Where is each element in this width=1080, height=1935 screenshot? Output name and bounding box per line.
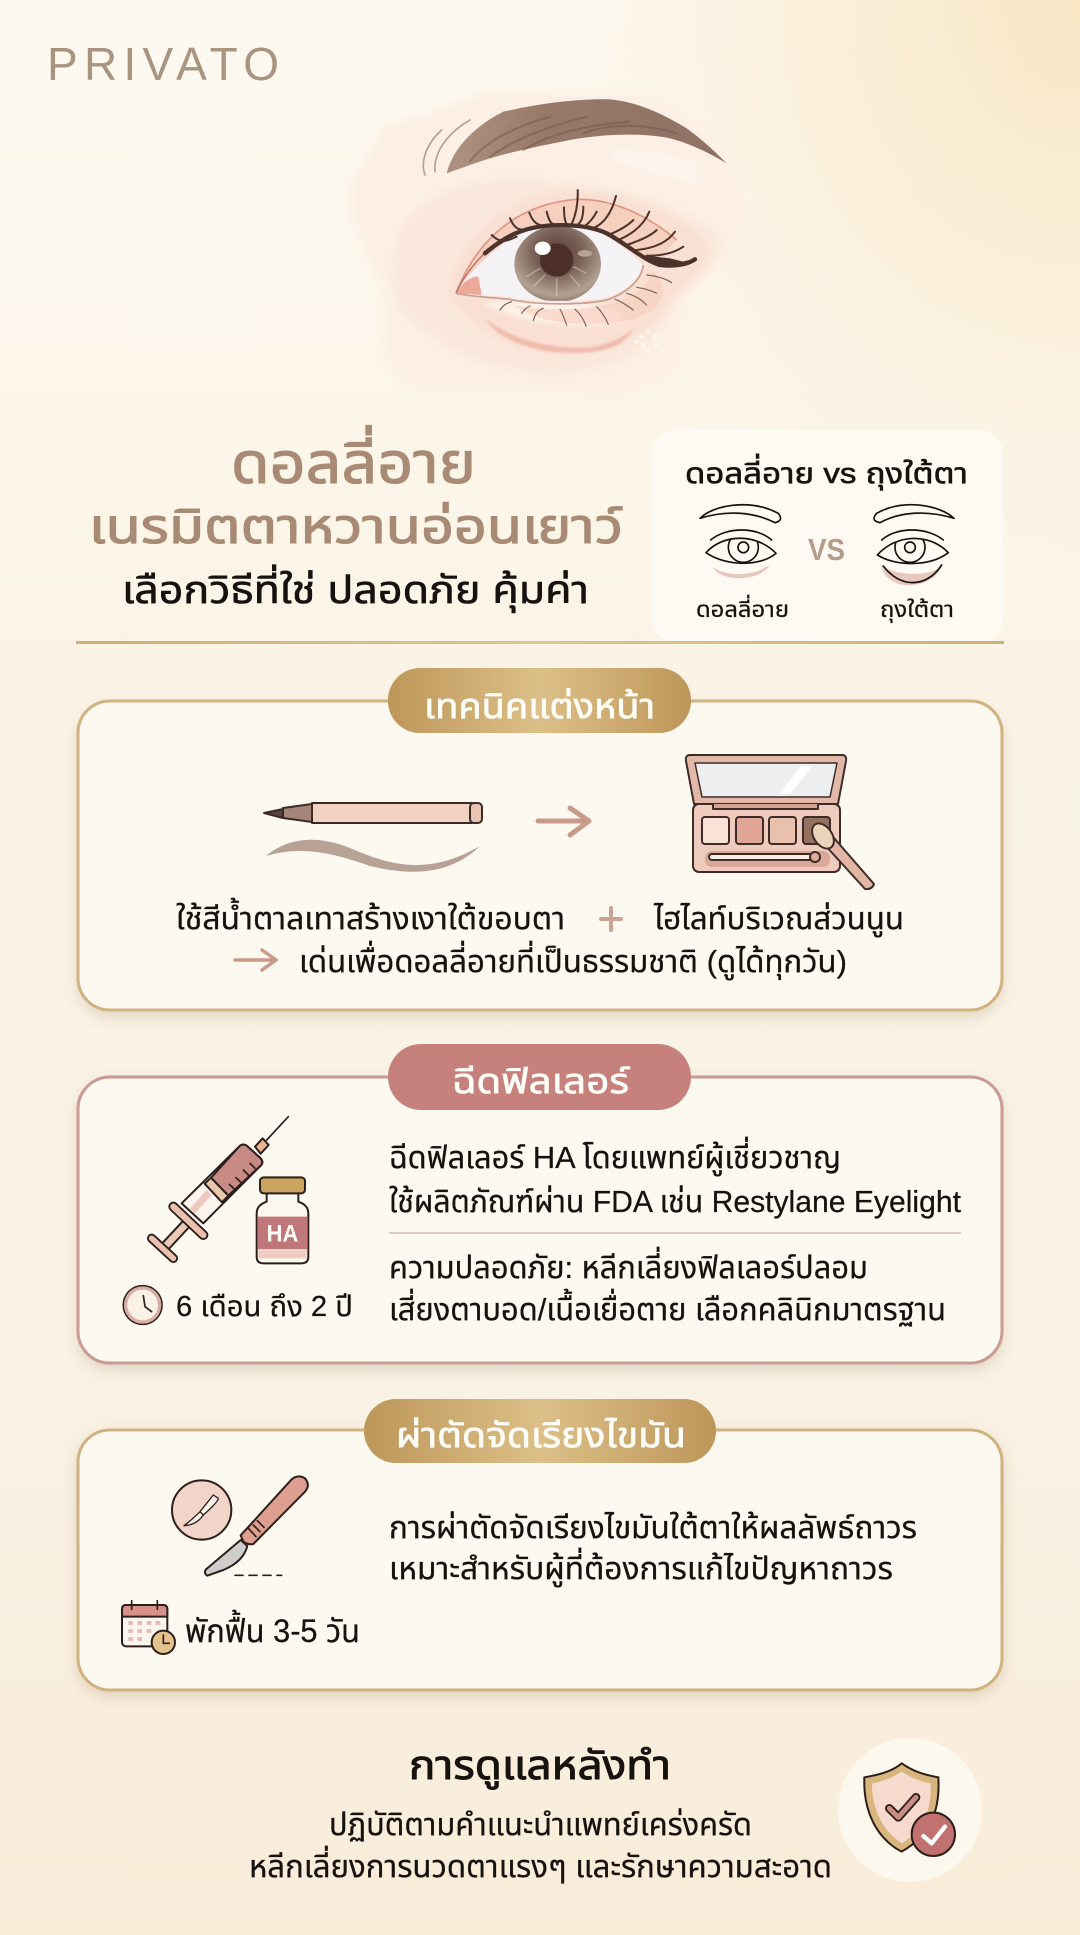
label: dolly eye: ดอลลี่อาย (696, 594, 789, 622)
icon: syringe (152, 1117, 288, 1258)
pill heading: surgery: ผ่าตัดจัดเรียงไขมัน (396, 1416, 686, 1455)
recovery time: พักฟื้น 3-5 วัน (185, 1609, 360, 1649)
title line 2: เนรมิตตาหวานอ่อนเยาว์ (89, 501, 623, 554)
icon: eyeshadow palette (686, 755, 874, 889)
lower lid (456, 265, 643, 304)
panel: dolly eye vs eye bag comparison (651, 430, 1003, 642)
sparkle (635, 330, 661, 352)
icon: left dolly eye (700, 505, 781, 578)
comparison heading: ดอลลี่อาย vs ถุงใต้ตา (685, 453, 968, 490)
icon: eyeliner pen (264, 803, 482, 823)
pill heading: filler: ฉีดฟิลเลอร์ (452, 1062, 631, 1101)
icon: calendar (122, 1601, 175, 1654)
aftercare heading: การดูแลหลังทำ (409, 1744, 671, 1789)
illustration: realistic eye (356, 96, 726, 382)
aftercare text: หลีกเลี่ยงการนวดตาแรงๆ และรักษาความสะอาด (249, 1845, 832, 1884)
title line 1: ดอลลี่อาย (231, 425, 476, 496)
surgery text: การผ่าตัดจัดเรียงไขมันใต้ตาให้ผลลัพธ์ถาวร (389, 1510, 917, 1545)
filler text block 1: ฉีดฟิลเลอร์ HA โดยแพทย์ผู้เชี่ยวชาญ (389, 1136, 841, 1176)
title line 3: เลือกวิธีที่ใช่ ปลอดภัย คุ้มค่า (122, 564, 589, 613)
upper lashes (492, 190, 695, 264)
technique text line 1 right: ไฮไลท์บริเวณส่วนนูน (653, 901, 904, 937)
title (89, 425, 623, 613)
pill heading: makeup technique: เทคนิคแต่งหน้า (424, 687, 655, 726)
iris (514, 226, 601, 302)
panel: filler injection (78, 1044, 1002, 1363)
icon: right eye bag (874, 505, 954, 585)
pupil (540, 243, 573, 277)
icon: shield with check (838, 1738, 982, 1882)
plus sign (601, 908, 621, 930)
lower lashes (500, 275, 672, 326)
filler safety text: เสี่ยงตาบอด/เนื้อเยื่อตาย เลือกคลินิกมาตรฐาน (389, 1288, 946, 1327)
icon: scalpel badge (172, 1480, 231, 1540)
surgery text: เหมาะสำหรับผู้ที่ต้องการแก้ไขปัญหาถาวร (389, 1547, 893, 1587)
VS label: VS (808, 532, 845, 567)
logo: PRIVATO: PRIVATO (47, 38, 279, 90)
result arrow (235, 950, 276, 970)
arrow to palette (538, 808, 589, 835)
tear duct (456, 277, 482, 295)
filler text block 1 (389, 1136, 961, 1219)
icon: brush stroke swoosh (266, 840, 480, 872)
inner lid line (456, 247, 492, 293)
upper lid (456, 199, 677, 293)
technique text line 2: เด่นเพื่อดอลลี่อายที่เป็นธรรมชาติ (ดูได้ทุกวัน) (299, 940, 847, 980)
gold divider (76, 641, 1004, 644)
aftercare section (249, 1738, 982, 1884)
filler safety text (389, 1246, 946, 1327)
pill heading: surgery (364, 1399, 716, 1463)
panel: makeup technique (78, 668, 1002, 1010)
panel: fat repositioning surgery (78, 1399, 1002, 1690)
aftercare text (249, 1807, 832, 1884)
icon: HA vial: HA (267, 1221, 298, 1248)
surgery text (389, 1510, 917, 1587)
aftercare text: ปฏิบัติตามคำแนะนำแพทย์เคร่งครัด (329, 1807, 752, 1842)
iris highlight (535, 242, 551, 255)
skin wash (351, 93, 744, 400)
eye white (456, 226, 643, 301)
eyebrow (423, 99, 727, 175)
icon: HA vial (257, 1177, 308, 1263)
upper lash line (485, 225, 695, 266)
icon: scalpel (205, 1476, 308, 1576)
filler safety text: ความปลอดภัย: หลีกเลี่ยงฟิลเลอร์ปลอม (389, 1246, 868, 1285)
pill heading: makeup technique (388, 668, 691, 733)
filler duration: 6 เดือน ถึง 2 ปี (176, 1291, 353, 1323)
technique text line 1 left: ใช้สีน้ำตาลเทาสร้างเงาใต้ขอบตา (176, 897, 565, 936)
shaded cheek and socket (393, 179, 720, 373)
under-eye dolly bag (485, 318, 633, 353)
icon: clock (123, 1286, 162, 1324)
pill heading: filler (388, 1044, 691, 1110)
label: eye bag: ถุงใต้ตา (880, 597, 954, 623)
filler text block 1: ใช้ผลิตภัณฑ์ผ่าน FDA เช่น Restylane Eyelight (389, 1184, 961, 1219)
